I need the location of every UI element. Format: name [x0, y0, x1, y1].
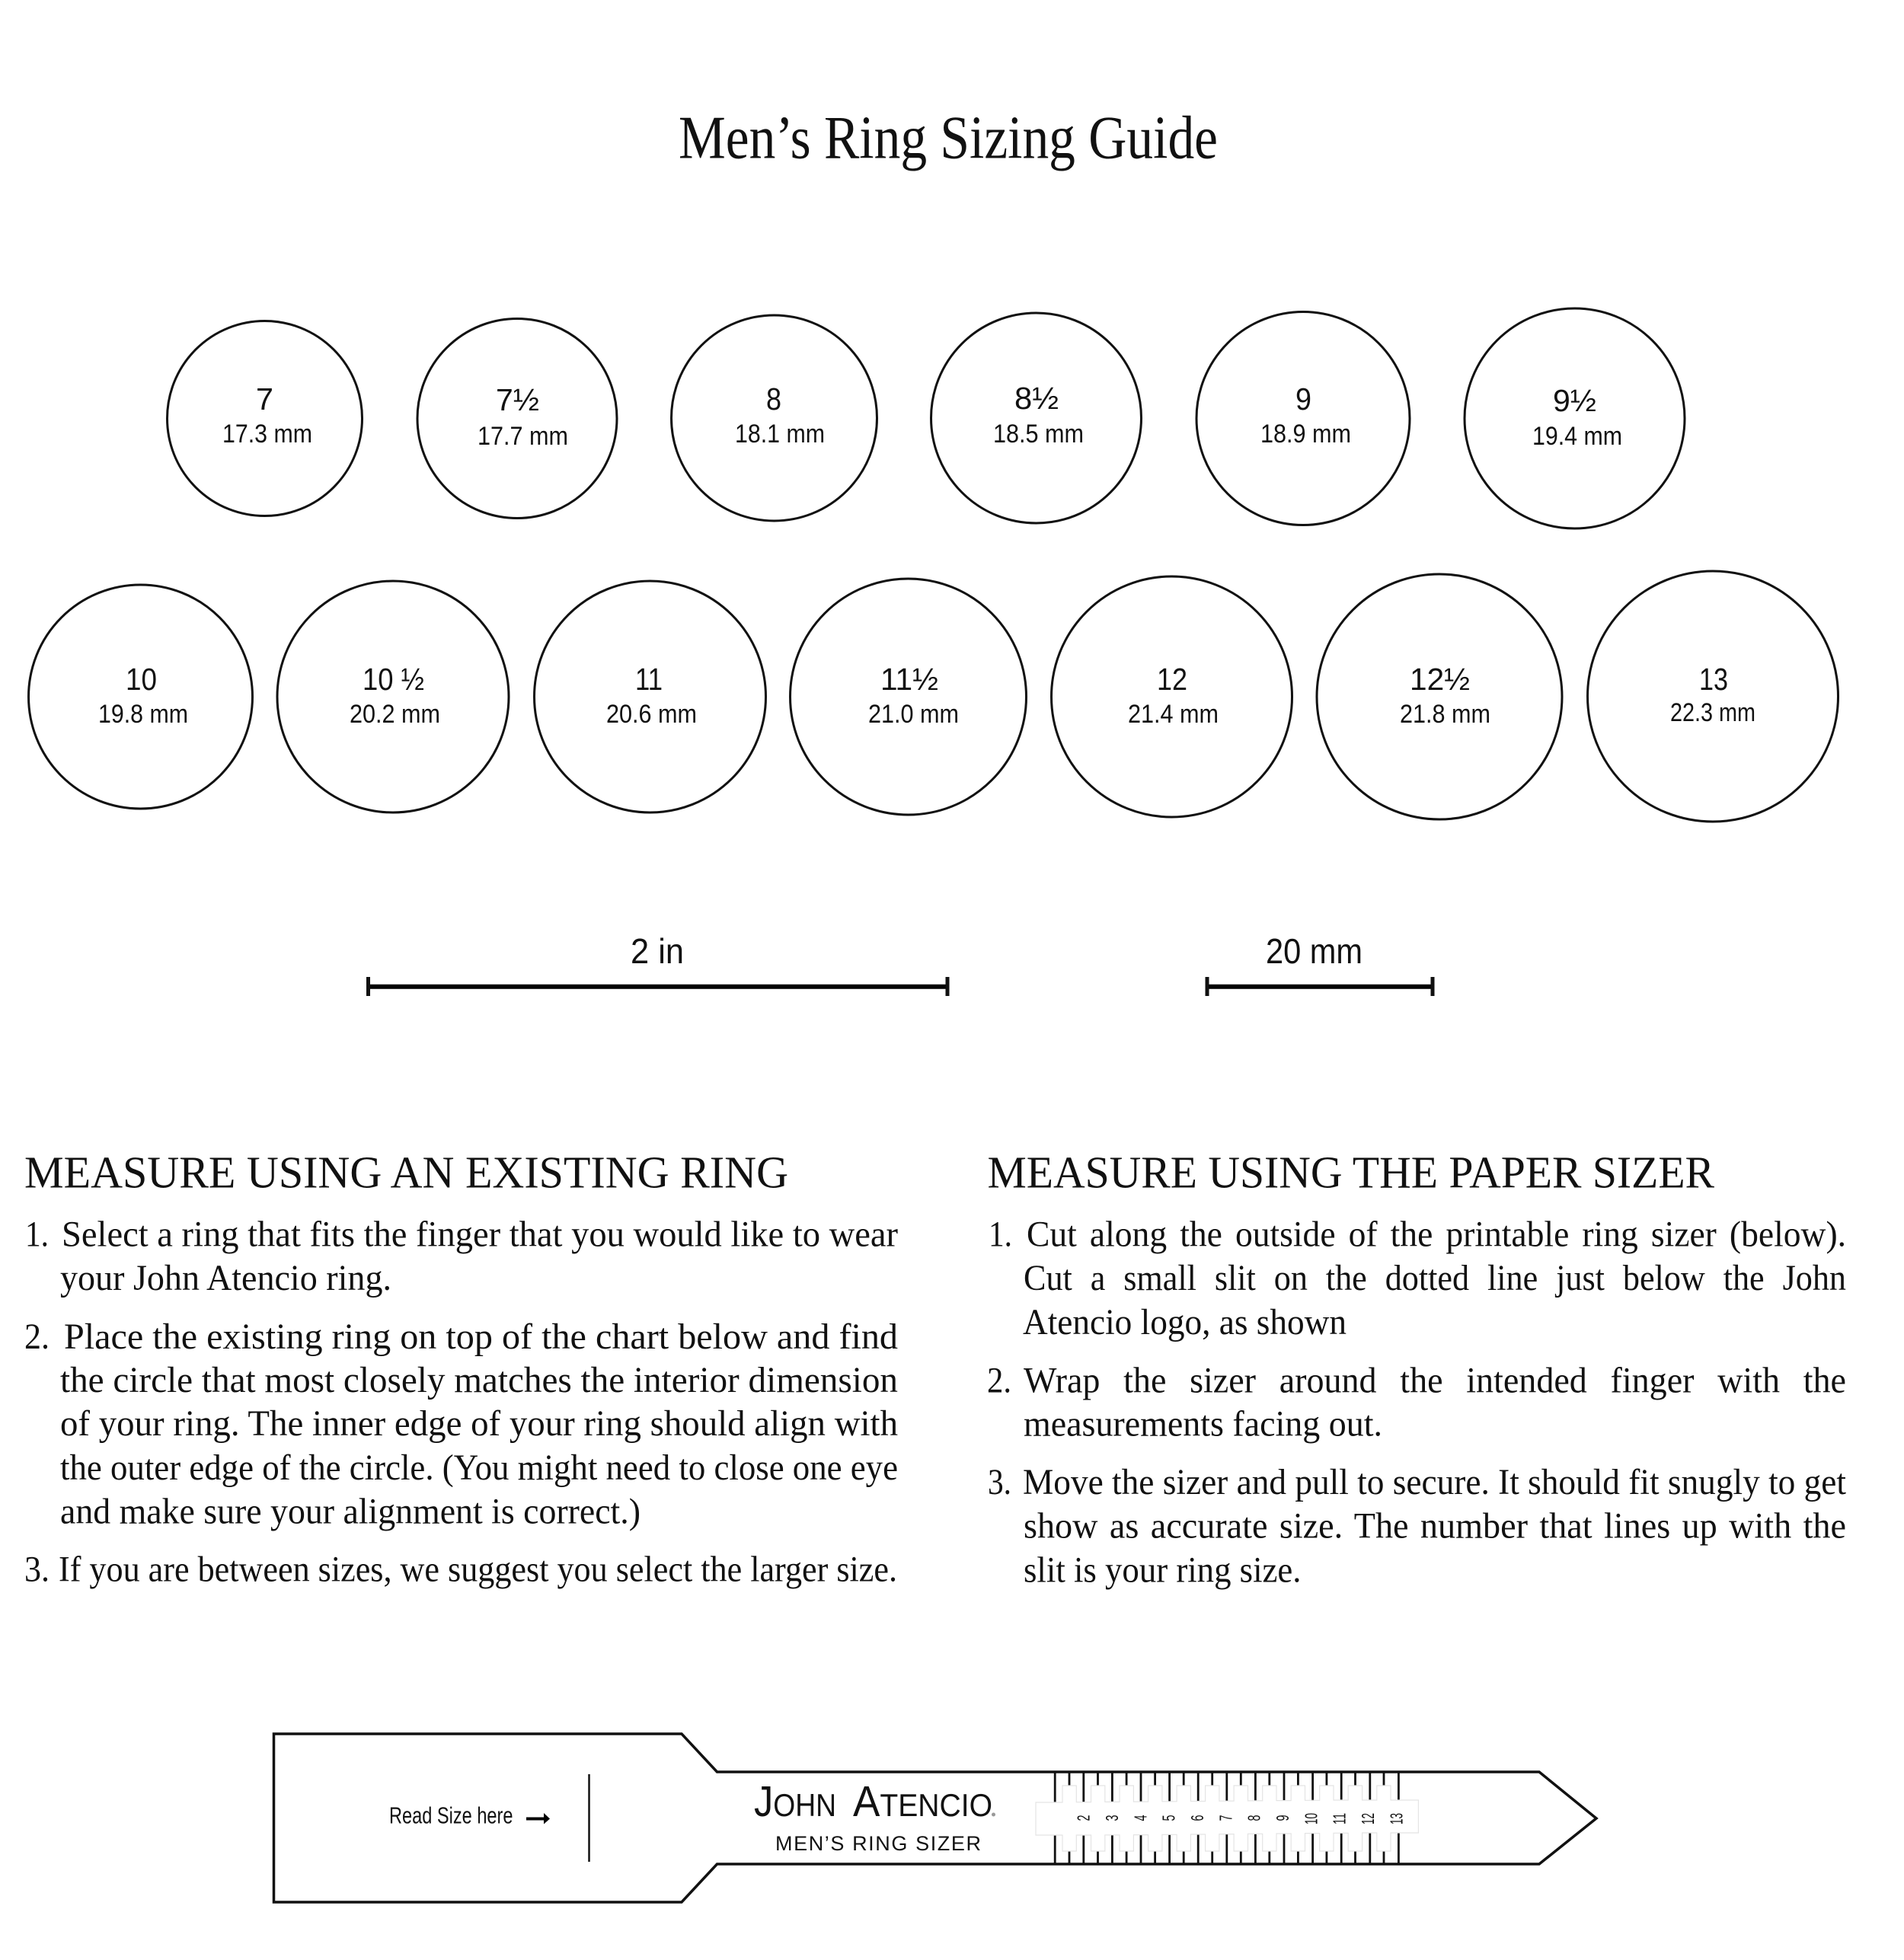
read size label: Read Size here	[389, 1802, 513, 1829]
ruler ticks	[1055, 1772, 1398, 1864]
step 3: existing ring: If you are between sizes, we suggest you select the larger size.	[59, 1549, 897, 1590]
ring circle: size 11 1/2: 11½	[880, 662, 938, 697]
scale bar: 20 mm: 20 mm	[1266, 931, 1363, 971]
ring circle: size 12: 12	[1157, 662, 1187, 697]
icon: arrow	[526, 1813, 550, 1824]
ring circle: size 10	[29, 585, 253, 809]
ring circle: size 8: 18.1 mm	[735, 420, 825, 449]
ring circle: size 7: 7	[256, 381, 273, 417]
step 1: existing ring	[25, 1214, 898, 1298]
ring circle: size 10: 19.8 mm	[98, 700, 188, 729]
logo: John Atencio	[754, 1777, 995, 1826]
ring circle: size 9	[1196, 312, 1410, 525]
ruler size numbers: 5	[1159, 1815, 1179, 1821]
logo: John Atencio: ATENCIO	[853, 1777, 992, 1826]
ring circle: size 9: 9	[1295, 381, 1311, 417]
step 3: paper sizer: show as accurate size. The number that lines up with the	[1024, 1506, 1846, 1546]
ruler size numbers: 8	[1244, 1815, 1264, 1821]
step 3: paper sizer	[988, 1462, 1847, 1590]
slit line	[588, 1774, 590, 1862]
step 2: existing ring: Place the existing ring on top of the chart below and find	[64, 1317, 898, 1357]
ring circle: size 7: 17.3 mm	[222, 420, 312, 449]
ruler size numbers: 2	[1074, 1815, 1094, 1821]
step 3: paper sizer: Move the sizer and pull to secure. It should fit snugly to get	[1023, 1462, 1847, 1502]
step 2: existing ring: the outer edge of the circle. (You might need to close one eye	[60, 1448, 898, 1488]
ruler size numbers: 11	[1330, 1813, 1350, 1824]
step 1: existing ring: your John Atencio ring.	[60, 1258, 391, 1298]
step 1: paper sizer: Cut along the outside of the printable ring sizer (below).	[1027, 1214, 1846, 1255]
ring circle: size 10 1/2	[277, 581, 509, 812]
ruler size numbers: 7	[1216, 1815, 1235, 1821]
ruler size numbers: 10	[1301, 1813, 1321, 1824]
step 2: existing ring: of your ring. The inner edge of your ring should align with	[60, 1403, 898, 1444]
sizer outline	[274, 1734, 1596, 1902]
logo: John Atencio: JOHN	[754, 1777, 836, 1826]
heading: paper sizer: MEASURE USING THE PAPER SIZER	[987, 1147, 1715, 1197]
ring circle: size 11 1/2	[791, 579, 1027, 815]
ring circle: size 12 1/2: 12½	[1410, 662, 1470, 697]
ring circle: size 9: 18.9 mm	[1260, 420, 1351, 449]
panel: measure using an existing ring	[24, 1147, 898, 1590]
step 1: paper sizer: Cut a small slit on the dotted line just below the John	[1024, 1258, 1846, 1298]
ring circle: size 9 1/2	[1465, 308, 1685, 528]
ring circle: size 7 1/2	[417, 318, 617, 518]
ring circle: size 7 1/2: 7½	[496, 382, 539, 417]
ring circle: size 11	[535, 581, 766, 812]
ring circle: size 12	[1051, 576, 1292, 817]
step 2: existing ring: and make sure your alignment is correct.)	[60, 1491, 641, 1532]
step 2: existing ring	[24, 1317, 898, 1532]
panel: printable paper ring sizer	[274, 1734, 1596, 1902]
ring circle: size 11: 11	[635, 662, 663, 697]
ring circle: size 8	[672, 315, 877, 521]
ring circle: size 8 1/2: 8½	[1014, 381, 1059, 416]
heading: existing ring: MEASURE USING AN EXISTING RING	[24, 1147, 788, 1197]
scale bar: 2 in	[369, 931, 947, 996]
scale bar: 20 mm	[1207, 931, 1433, 996]
ring circle: size 9 1/2: 19.4 mm	[1532, 422, 1622, 451]
step 3: paper sizer: 3.	[988, 1462, 1011, 1502]
sizer subtitle: MEN’S RING SIZER	[775, 1832, 981, 1855]
ring circle: size 7	[168, 321, 363, 516]
ring circle: size 10 1/2: 10 ½	[363, 662, 424, 697]
ruler size numbers: 3	[1102, 1815, 1122, 1821]
ring circle: size 11 1/2: 21.0 mm	[868, 700, 959, 729]
panel: ring size circles	[29, 308, 1839, 822]
ring circle: size 12: 21.4 mm	[1128, 700, 1219, 729]
ring circle: size 10: 10	[126, 662, 157, 697]
ruler size numbers: 4	[1130, 1815, 1150, 1821]
ruler comb outline	[1036, 1786, 1418, 1851]
step 1: paper sizer	[989, 1214, 1846, 1342]
step 1: paper sizer: Atencio logo, as shown	[1023, 1302, 1347, 1342]
ruler size numbers: 12	[1358, 1813, 1378, 1824]
ring circle: size 13: 22.3 mm	[1670, 698, 1755, 727]
ring circle: size 11: 20.6 mm	[606, 700, 697, 729]
step 2: existing ring: the circle that most closely matches the interior dimension	[60, 1360, 898, 1400]
step 2: existing ring: 2.	[24, 1317, 50, 1357]
ring circle: size 8 1/2: 18.5 mm	[993, 420, 1084, 449]
ring circle: size 13: 13	[1699, 662, 1728, 697]
ring circle: size 8: 8	[766, 381, 781, 417]
ring circle: size 7 1/2: 17.7 mm	[478, 422, 568, 451]
ring circle: size 9 1/2: 9½	[1553, 383, 1596, 418]
ruler size numbers: 9	[1273, 1815, 1292, 1821]
ring circle: size 12 1/2	[1317, 574, 1562, 819]
step 2: paper sizer: Wrap the sizer around the intended finger with the	[1024, 1360, 1846, 1401]
step 3: paper sizer: slit is your ring size.	[1024, 1550, 1301, 1590]
step 1: existing ring: Select a ring that fits the finger that you would like to wear	[62, 1214, 898, 1255]
step 3: existing ring: 3.	[24, 1549, 50, 1590]
step 2: paper sizer	[987, 1360, 1846, 1444]
ring circle: size 10 1/2: 20.2 mm	[350, 700, 440, 729]
ruler size numbers: 13	[1386, 1813, 1406, 1824]
scale bar: 2 in: 2 in	[631, 931, 684, 971]
title: Men’s Ring Sizing Guide	[679, 104, 1218, 172]
ruler size numbers	[1074, 1813, 1406, 1824]
ring circle: size 12 1/2: 21.8 mm	[1400, 700, 1490, 729]
step 1: paper sizer: 1.	[989, 1214, 1012, 1255]
step 2: paper sizer: measurements facing out.	[1024, 1404, 1382, 1444]
ring circle: size 8 1/2	[931, 313, 1141, 523]
ring circle: size 13	[1587, 571, 1839, 822]
step 2: paper sizer: 2.	[987, 1360, 1011, 1401]
ruler size numbers: 6	[1187, 1815, 1207, 1821]
step 1: existing ring: 1.	[25, 1214, 49, 1255]
panel: measure using the paper sizer	[987, 1147, 1847, 1590]
